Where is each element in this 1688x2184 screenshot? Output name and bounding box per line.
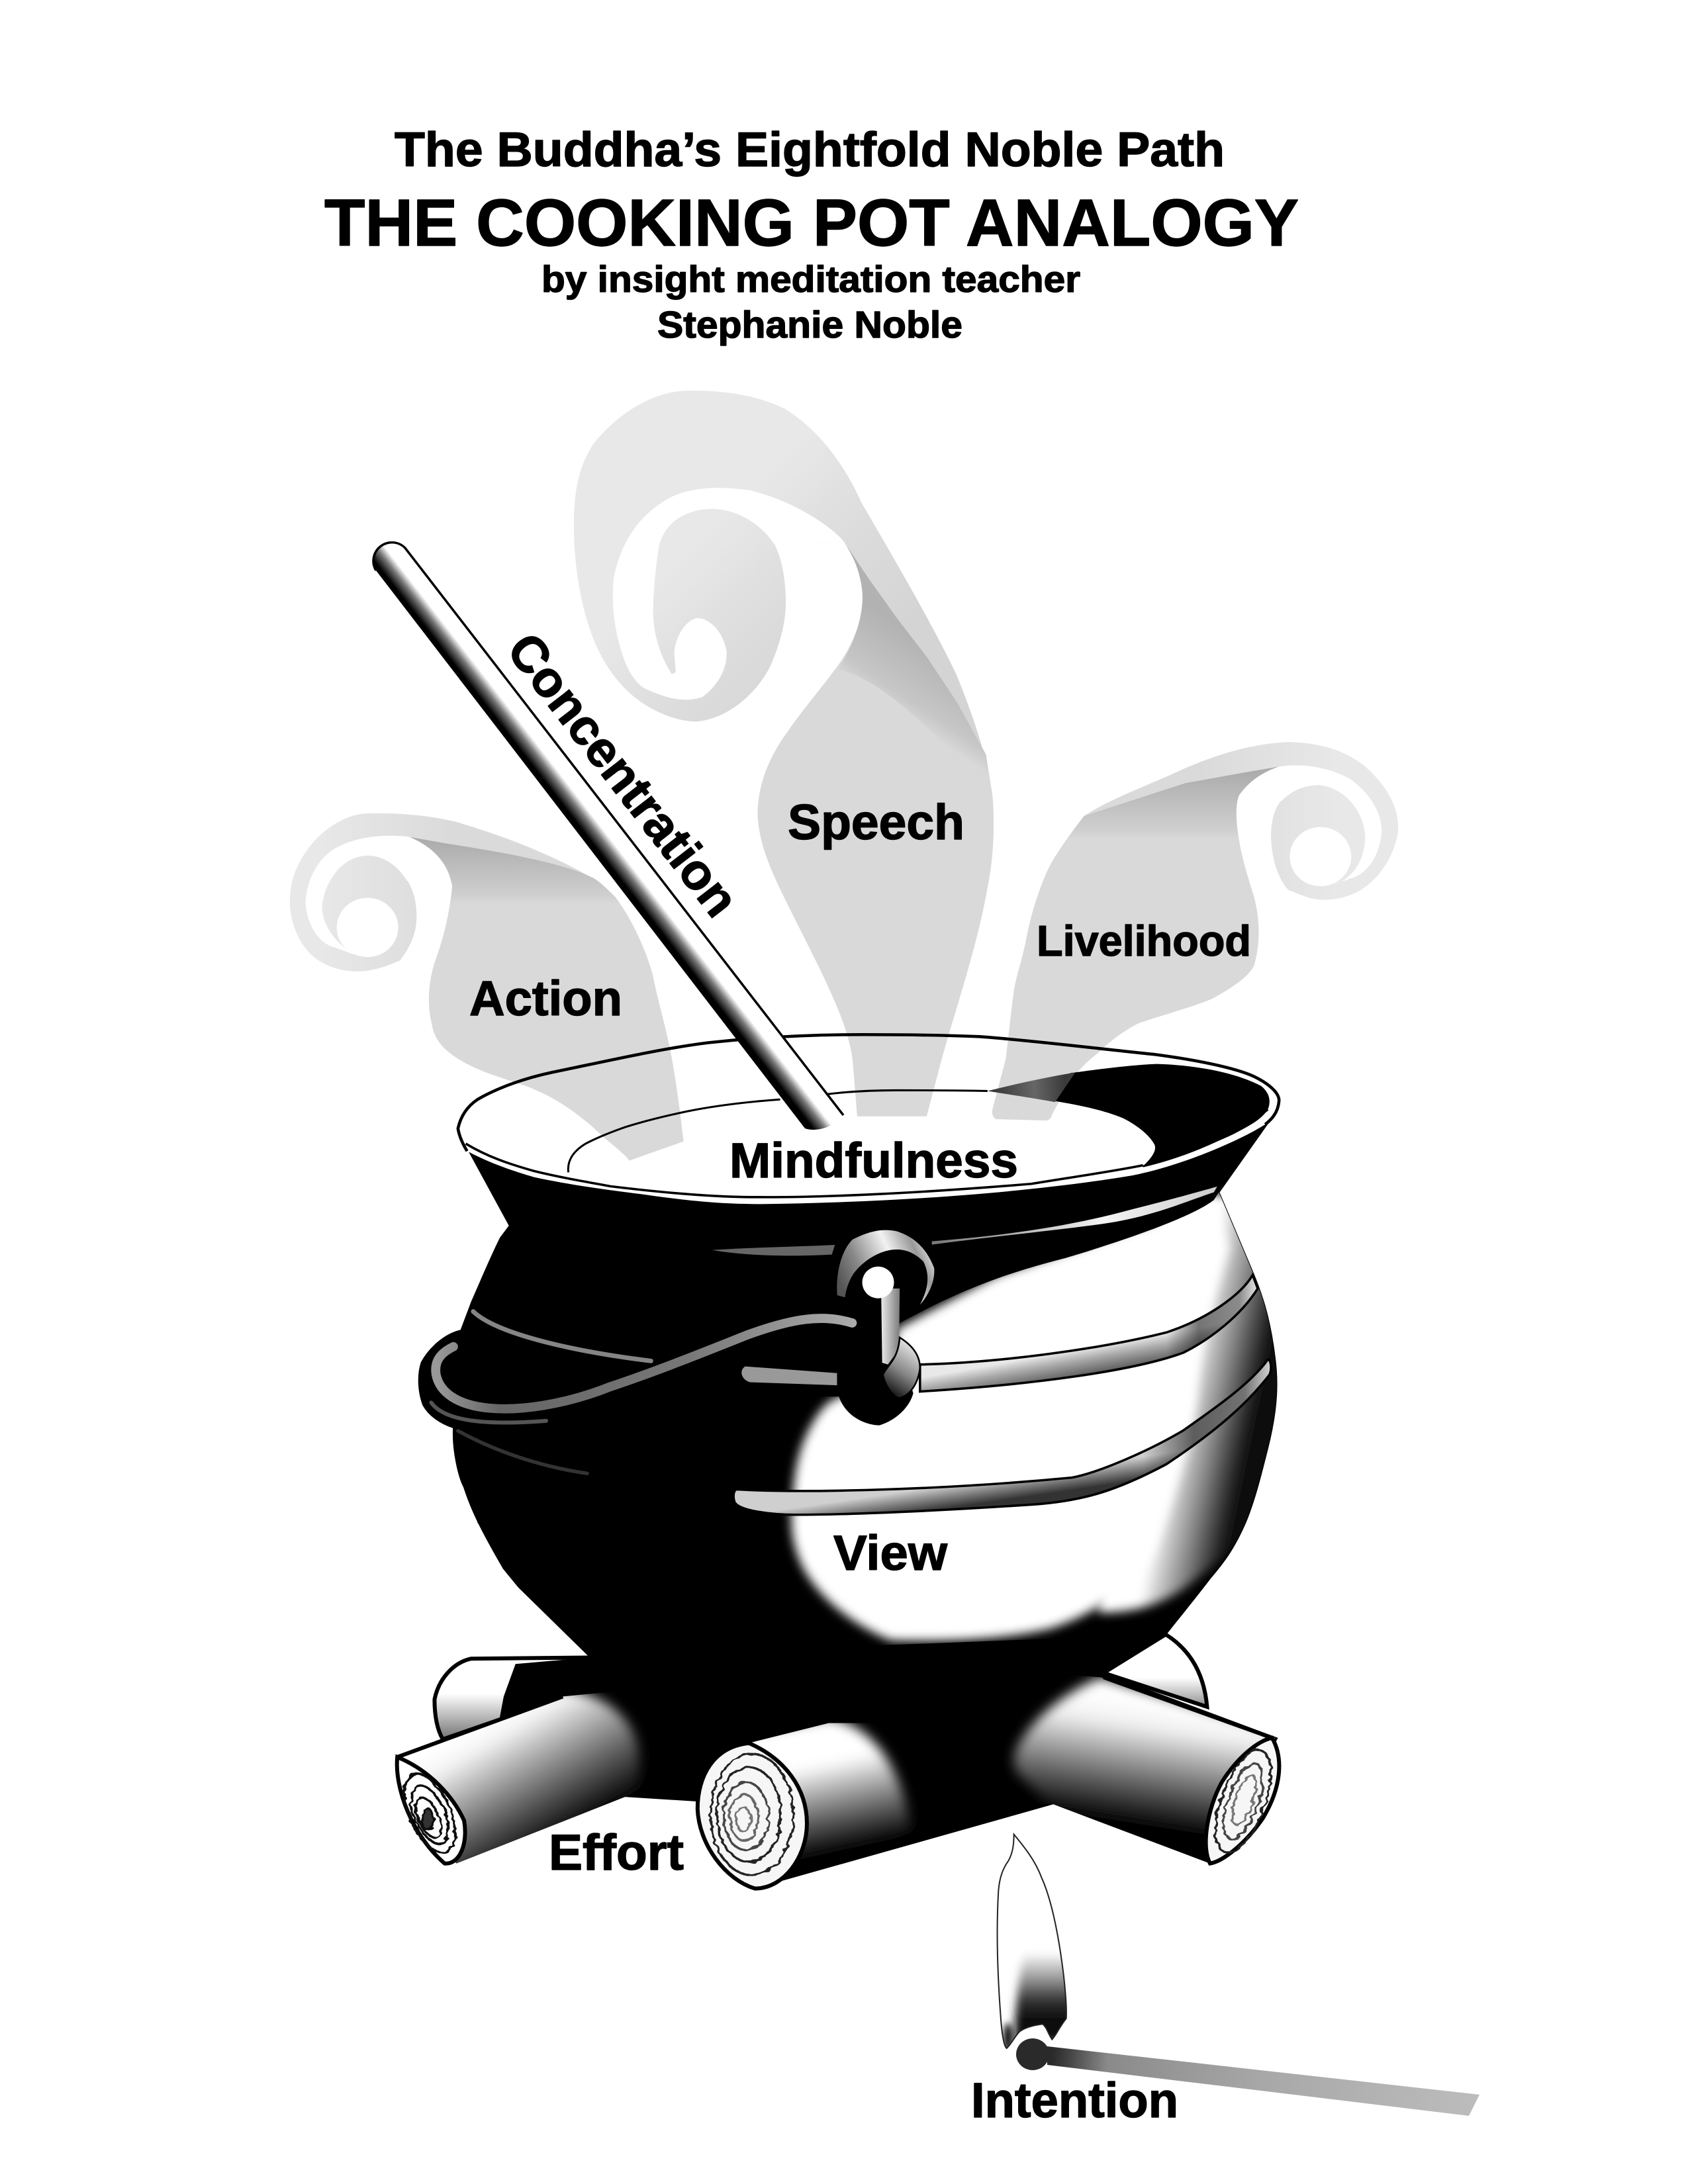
pot left side details [431, 1245, 852, 1473]
front logs [371, 1677, 1293, 1900]
handle lug [837, 1230, 934, 1426]
rim outline [458, 1034, 1279, 1151]
back left log [434, 1657, 589, 1739]
shadow fade [988, 1072, 1075, 1102]
label: livelihood: Livelihood [1037, 917, 1251, 965]
logs behind the pot and pot base [397, 1522, 1278, 1889]
steam: action [290, 813, 684, 1161]
label: effort: Effort [549, 1825, 684, 1881]
match head [1016, 2038, 1049, 2070]
back right log [1103, 1635, 1207, 1707]
inner rim line [466, 1144, 1143, 1197]
left log [395, 1692, 646, 1866]
label: view: View [833, 1525, 947, 1580]
pot rim lines and inner shadow [458, 1034, 1279, 1197]
label: mindfulness: Mindfulness [729, 1133, 1018, 1188]
upper band highlight [712, 1245, 835, 1255]
middle rib shade [1169, 1277, 1256, 1355]
flame [997, 1833, 1067, 2049]
label: concentration: Concentration [496, 623, 749, 927]
main title: THE COOKING POT ANALOGY [324, 186, 1299, 260]
inner shadow crescent [1055, 1064, 1270, 1166]
steam: speech [574, 390, 994, 1116]
handle wire [431, 1318, 852, 1423]
byline: by insight meditation teacher [541, 258, 1080, 300]
middle rib [920, 1275, 1258, 1392]
spoon [373, 543, 843, 1130]
heading: The Buddha's Eightfold Noble Path: The Buddha’s Eightfold Noble Path [395, 123, 1225, 177]
handle stub [741, 1367, 837, 1385]
pot highlight and ribs [735, 1185, 1276, 1645]
author name: Stephanie Noble [657, 304, 962, 346]
pot body [418, 1124, 1278, 1656]
white strip right of crescent [1143, 1110, 1268, 1166]
center log [698, 1717, 912, 1900]
match and flame [988, 1831, 1479, 2116]
upper rib highlight [932, 1187, 1217, 1245]
label: intention: Intention [971, 2073, 1178, 2128]
pot and steam labels [469, 623, 1251, 2128]
pot silhouette [419, 1123, 1277, 1657]
illustration: cooking pot analogy [290, 130, 1479, 2118]
rim bowl [458, 1034, 1279, 1204]
left rib highlights [458, 1312, 651, 1473]
black pot base shadow [397, 1522, 1278, 1889]
lower rib [733, 1359, 1271, 1515]
inner ellipse line [568, 1090, 988, 1172]
match stick [1047, 2046, 1479, 2116]
right log [1014, 1677, 1293, 1874]
lower rib shade [1147, 1363, 1267, 1471]
steam: livelihood [992, 742, 1398, 1120]
title block [324, 123, 1299, 346]
label: speech: Speech [788, 794, 964, 850]
label: action: Action [469, 971, 622, 1026]
